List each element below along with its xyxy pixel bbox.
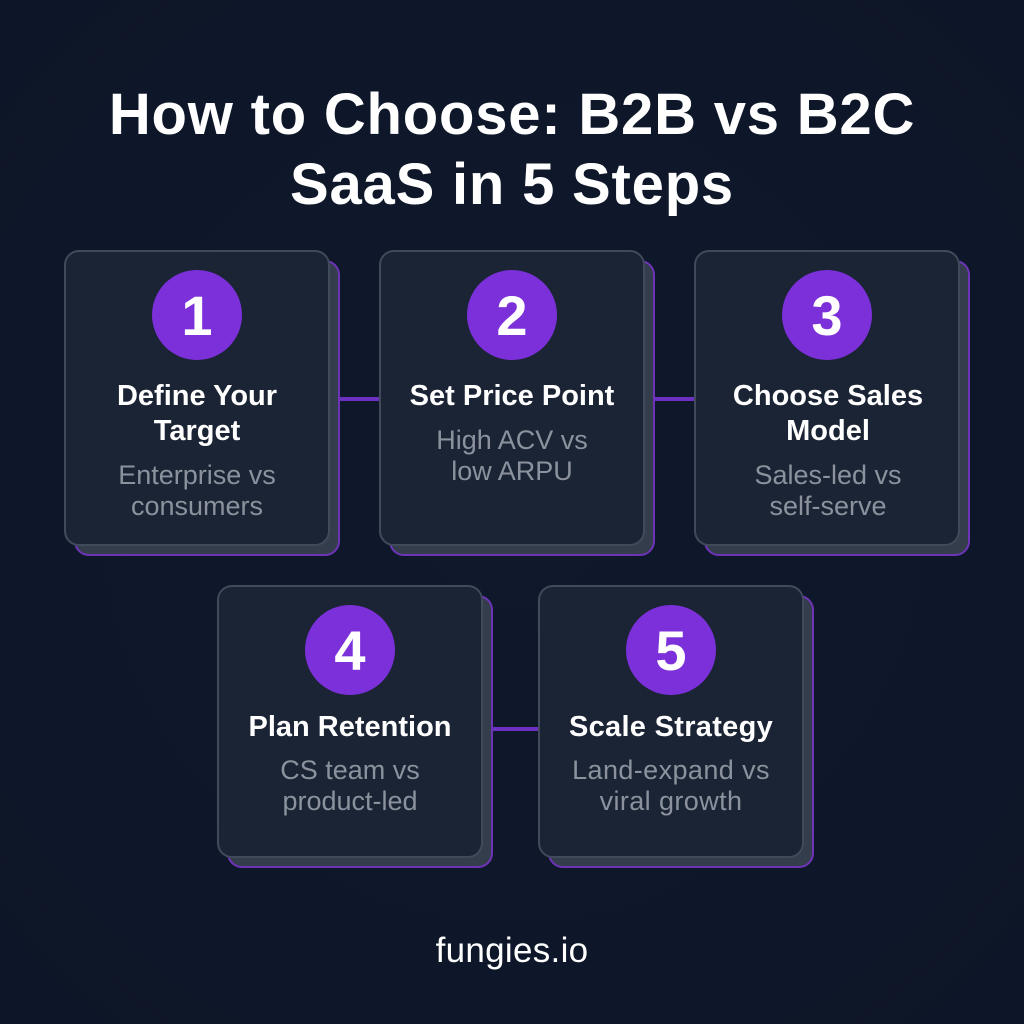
icon: number 3 (782, 270, 872, 360)
heading: Choose Sales Model: Choose Sales (733, 380, 923, 412)
icon: number 2 (467, 270, 557, 360)
text: Land-expand vs viral growth: viral growth (600, 786, 742, 816)
icon: number 5 (626, 605, 716, 695)
heading: Define Your Target (117, 380, 277, 447)
text: Sales-led vs self-serve: self-serve (769, 491, 887, 521)
text: Land-expand vs viral growth (572, 755, 770, 816)
heading: Define Your Target: Define Your (117, 380, 277, 412)
title (109, 82, 915, 217)
heading: Choose Sales Model: Model (786, 415, 870, 447)
panel: step 5 (538, 585, 814, 868)
connector: step 4 to 5 (493, 727, 538, 731)
text: Sales-led vs self-serve: Sales-led vs (754, 460, 902, 490)
panel: step 4 (217, 585, 493, 868)
connector: step 2 to 3 (655, 397, 694, 401)
heading: Choose Sales Model (733, 380, 923, 447)
text: Enterprise vs consumers: Enterprise vs (118, 460, 276, 490)
icon: number 2: 2 (496, 284, 528, 347)
panel: step 1 (64, 250, 340, 556)
icon: number 1 (152, 270, 242, 360)
icon: number 4 (305, 605, 395, 695)
panel: step 3 (694, 250, 970, 556)
text: CS team vs product-led: product-led (282, 786, 418, 816)
icon: number 5: 5 (655, 619, 687, 682)
connector: step 1 to 2 (340, 397, 379, 401)
text: CS team vs product-led (280, 755, 420, 816)
text: Enterprise vs consumers (118, 460, 276, 521)
heading: Plan Retention: Plan Retention (248, 711, 452, 743)
text: Sales-led vs self-serve (754, 460, 902, 521)
icon: number 4: 4 (334, 619, 366, 682)
text: Enterprise vs consumers: consumers (131, 491, 263, 521)
text: High ACV vs low ARPU (436, 425, 588, 486)
title: How to Choose: B2B vs B2C (109, 82, 915, 147)
text: High ACV vs low ARPU: low ARPU (451, 456, 573, 486)
text: CS team vs product-led: CS team vs (280, 755, 420, 785)
title: SaaS in 5 Steps (290, 152, 734, 217)
heading: Scale Strategy: Scale Strategy (569, 711, 773, 743)
icon: number 1: 1 (181, 284, 213, 347)
heading: Set Price Point: Set Price Point (410, 380, 614, 412)
text: High ACV vs low ARPU: High ACV vs (436, 425, 588, 455)
text: Land-expand vs viral growth: Land-expand vs (572, 755, 770, 785)
heading: Define Your Target: Target (154, 415, 240, 447)
panel: step 2 (379, 250, 655, 556)
footer: brand: fungies.io (436, 931, 588, 970)
icon: number 3: 3 (811, 284, 843, 347)
